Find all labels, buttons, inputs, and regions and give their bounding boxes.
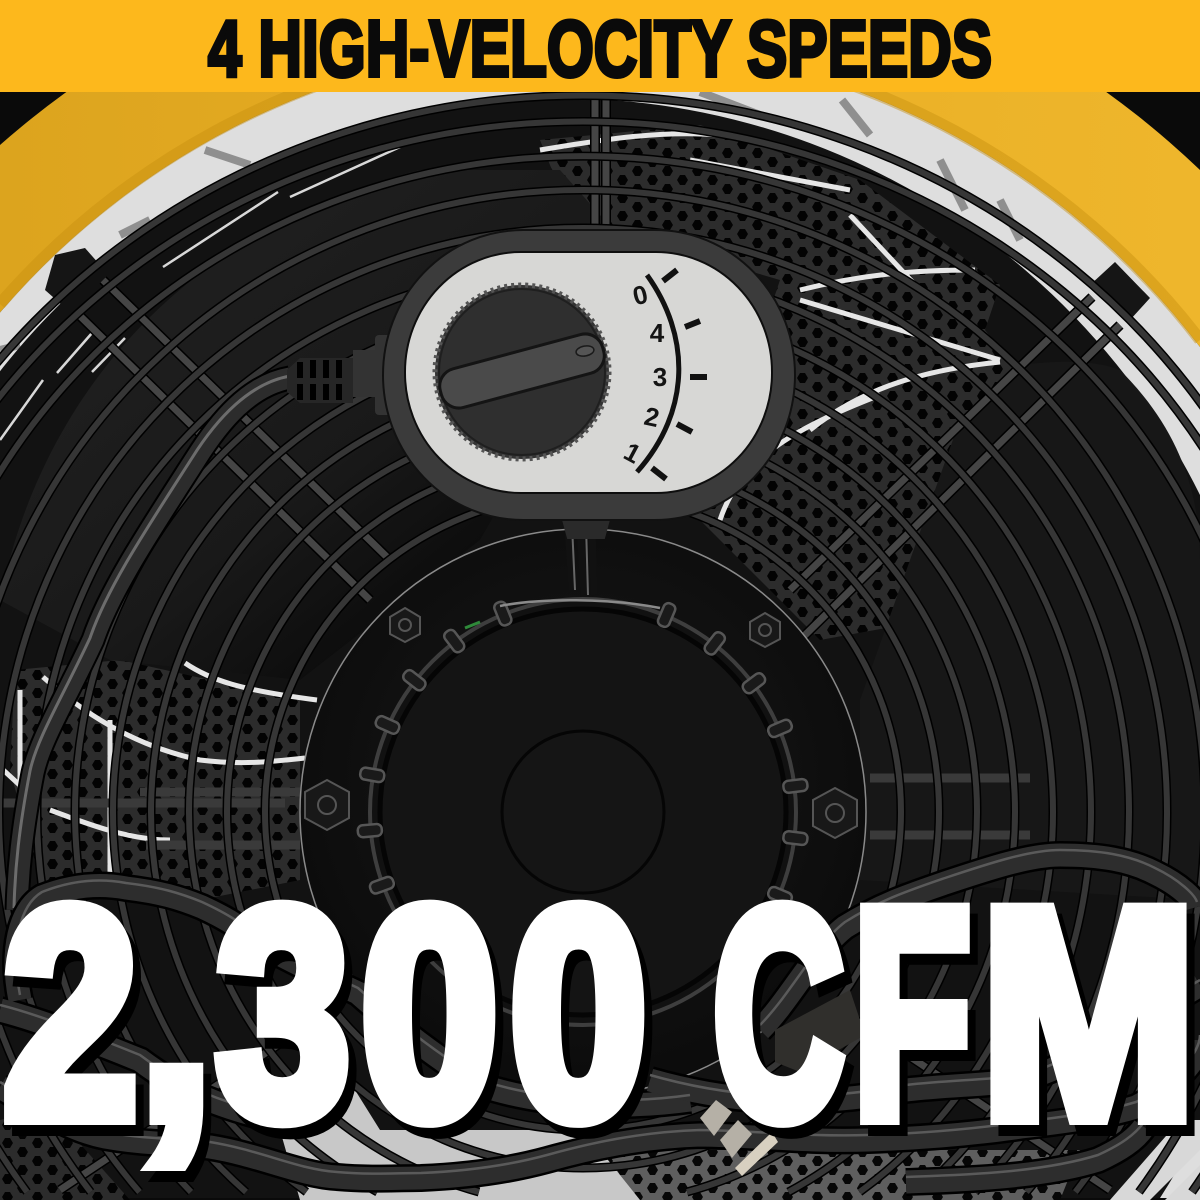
speed scale — [619, 270, 707, 479]
speed scale: 0 — [630, 279, 651, 311]
headline shadow: 3 — [224, 858, 358, 1190]
banner — [0, 0, 1200, 93]
headline text: C — [713, 847, 844, 1179]
mounting clamps on yellow ring — [45, 248, 1150, 320]
silver blade: bottom right — [1110, 1120, 1200, 1200]
headline text: 0 — [510, 847, 647, 1179]
headline: 2,300 CFM — [3, 847, 1200, 1190]
silver blade: bottom centre — [280, 1050, 660, 1200]
perforated mesh: bottom left — [0, 1110, 130, 1200]
guard: rear horizontal rods — [0, 778, 1030, 845]
perforated mesh: bottom — [600, 1150, 1080, 1200]
headline shadow: 0 — [369, 858, 506, 1190]
cord strain relief — [287, 335, 393, 415]
headline text: , — [139, 847, 213, 1179]
fan housing: yellow ring — [0, 0, 1200, 347]
motor hub — [502, 731, 664, 893]
speed scale: 4 — [650, 318, 665, 348]
coiled cords — [0, 850, 1200, 1182]
headline text — [3, 847, 1196, 1179]
headline shadow: C — [721, 858, 852, 1190]
control box — [383, 230, 795, 520]
headline shadow: F — [861, 858, 979, 1190]
headline text: 3 — [216, 847, 350, 1179]
motor clips — [357, 600, 808, 906]
power plug — [700, 990, 865, 1176]
perforated mesh: top — [540, 125, 1040, 640]
blade slit highlights — [0, 147, 400, 440]
speed scale: 1 — [619, 436, 646, 470]
speed scale: 2 — [642, 401, 662, 433]
blade: upper left — [0, 170, 640, 680]
headline text: 0 — [361, 847, 498, 1179]
headline shadow: , — [147, 858, 221, 1190]
blade edge highlights — [0, 134, 1000, 890]
perforated mesh: left — [10, 660, 300, 900]
headline shadow: 2 — [11, 858, 146, 1190]
motor housing — [370, 599, 796, 1025]
headline shadow: 0 — [518, 858, 655, 1190]
motor plate — [300, 529, 866, 1095]
mounting bolts — [305, 608, 857, 838]
headline text: F — [853, 847, 971, 1179]
headline text: 2 — [3, 847, 138, 1179]
wires from control box to motor — [562, 516, 610, 595]
speed scale: 3 — [653, 362, 667, 392]
headline shadow — [11, 858, 1200, 1190]
speed knob — [435, 285, 609, 459]
blade: right — [860, 362, 1200, 900]
power cord — [14, 376, 290, 910]
